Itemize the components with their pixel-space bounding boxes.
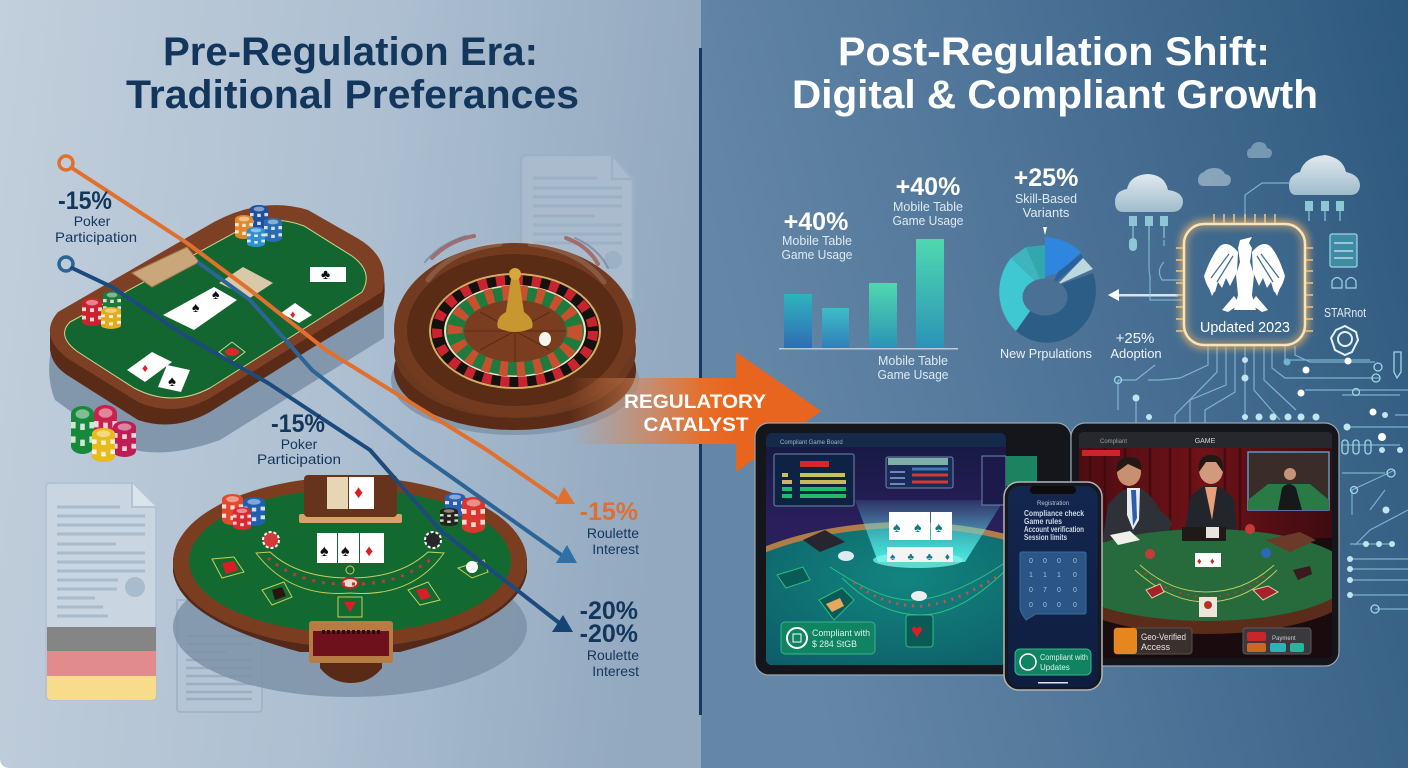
device: tablet left, game screen: Compliant Game Board [780, 440, 843, 446]
blackjack chip tray [309, 621, 393, 663]
stat: roulette interest orange: Roulette [587, 525, 639, 541]
phone keypad: 0 [1029, 602, 1033, 609]
stat: mobile usage left [782, 208, 852, 262]
icon: hexagon nut [1331, 326, 1358, 355]
eagle emblem [1204, 237, 1285, 312]
phone keypad: 1 [1043, 572, 1047, 579]
icon: background document top right [521, 155, 633, 300]
poker table community cards: ♠ [192, 299, 200, 315]
stat: skill-based variants: +25% [1014, 164, 1078, 192]
arrow: regulatory catalyst: REGULATORY [624, 392, 766, 413]
phone text [1024, 509, 1084, 542]
phone keypad: 0 [1073, 572, 1077, 579]
blackjack chip stacks [222, 493, 485, 548]
poker table community cards: ♠ [212, 286, 220, 302]
dealer man [1102, 457, 1172, 545]
phone compliance badge [1015, 649, 1091, 675]
label: new regulations: New Prpulations [1000, 346, 1092, 361]
blackjack table [173, 475, 527, 697]
blackjack dealer tray [299, 475, 402, 523]
title: pre-regulation era [126, 30, 579, 117]
icon: regulatory chip with eagle: Updated 2023 [1200, 319, 1290, 336]
phone keypad: 0 [1029, 558, 1033, 565]
age verified badge: Geo-Verified [1141, 632, 1186, 642]
phone keypad [1020, 552, 1086, 620]
stat: skill-based variants: Variants [1023, 205, 1070, 220]
roulette wheel [391, 236, 639, 435]
floating cards [887, 512, 953, 563]
phone compliance badge: Updates [1040, 663, 1070, 672]
stat: roulette interest navy: -20% [580, 597, 638, 625]
trend line: orange poker decline [59, 156, 575, 504]
age verified badge: Access [1141, 642, 1171, 652]
poker dealer tray [132, 247, 199, 287]
label: mobile usage under chart [878, 353, 948, 382]
poker chip stacks [82, 205, 282, 329]
icon: cloud small top [1247, 142, 1272, 158]
live table details [1110, 524, 1316, 617]
stat: adoption: Adoption [1110, 346, 1162, 361]
stat: roulette interest navy: Roulette [587, 647, 639, 663]
blackjack betting spots [222, 558, 478, 612]
arrow: regulatory catalyst: CATALYST [644, 415, 749, 436]
phone keypad: 0 [1043, 602, 1047, 609]
arrow: chip to pie [1108, 289, 1178, 301]
poker table community cards: ♣ [321, 266, 330, 282]
device: phone: Registration [1037, 501, 1069, 507]
rules panel [774, 454, 854, 506]
stat: mobile usage top: Mobile Table [893, 199, 963, 214]
stat: adoption: +25% [1116, 330, 1154, 347]
blackjack betting arc [212, 552, 488, 617]
phone keypad: 0 [1073, 558, 1077, 565]
stat: roulette interest orange: Interest [592, 541, 639, 557]
stat: mobile usage left: Game Usage [782, 247, 852, 262]
phone keypad: 1 [1029, 572, 1033, 579]
title: pre-regulation era: Pre-Regulation Era: [163, 30, 538, 74]
age verified badge [1114, 628, 1192, 654]
poker table community cards: ♦ [290, 309, 296, 321]
floating cards: ♠ [893, 519, 901, 535]
stat: mobile usage left: +40% [784, 208, 848, 236]
trend line: navy decline [59, 257, 573, 632]
circuit traces [1118, 183, 1408, 609]
floating cards: ♠ [935, 519, 943, 535]
label: start: STARnot [1324, 305, 1366, 320]
live table details: ♦ [1210, 556, 1215, 566]
poker table [49, 205, 385, 452]
title: pre-regulation era: Traditional Preferances [126, 73, 579, 117]
betting spots [777, 551, 1006, 647]
phone keypad: 0 [1057, 558, 1061, 565]
stat: poker participation middle: Participation [257, 451, 341, 467]
stat: poker participation middle [257, 410, 341, 467]
blackjack cards: ♠ [341, 543, 350, 560]
icon: server panel [1330, 234, 1357, 288]
game table surface [766, 522, 1004, 665]
phone text: Session limits [1024, 533, 1067, 542]
poker table community cards [127, 266, 346, 392]
phone keypad: 7 [1043, 587, 1047, 594]
icon: background document bottom [177, 600, 262, 712]
stat: mobile usage top [892, 173, 964, 228]
floating cards: ♠♣♣♦ [890, 552, 950, 563]
poker table community cards: ♠ [168, 373, 176, 390]
phone keypad: 0 [1073, 602, 1077, 609]
phone text: Compliance check [1024, 509, 1084, 518]
inset video panel [1248, 452, 1329, 510]
stat: poker participation top: -15% [58, 187, 112, 215]
arrow: regulatory catalyst [570, 352, 821, 472]
stat: skill-based variants: Skill-Based [1015, 191, 1077, 206]
icon: regulatory chip with eagle [1176, 214, 1313, 345]
stat: roulette interest navy: Interest [592, 663, 639, 679]
stat: poker participation middle: -15% [271, 410, 325, 438]
roulette motion streaks [425, 236, 608, 282]
stat: roulette interest orange: -15% [580, 498, 638, 526]
live table [1102, 598, 1332, 634]
stat: mobile usage left: Mobile Table [782, 233, 852, 248]
live table details: ♦ [1197, 556, 1202, 566]
green promo tile [1006, 456, 1037, 486]
title: post-regulation shift: Post-Regulation Shift: [838, 30, 1270, 74]
icon: cloud left [1115, 174, 1183, 251]
stat: mobile usage top: Game Usage [892, 213, 964, 228]
circuit nodes [1132, 357, 1403, 598]
phone compliance badge: Compliant with [1040, 653, 1088, 662]
blackjack cards: ♦ [365, 543, 373, 560]
chips: loose stack [71, 405, 136, 462]
label: mobile usage under chart: Game Usage [878, 367, 948, 382]
roulette spindle [497, 272, 533, 332]
phone keypad: 0 [1029, 587, 1033, 594]
stat: poker participation middle: Poker [281, 436, 318, 452]
trend line: light blue decline [199, 263, 577, 563]
stat: mobile usage top: +40% [896, 173, 960, 201]
central divider [699, 48, 702, 715]
compliance badge tablet [781, 622, 875, 654]
stat: roulette interest navy: -20% [580, 620, 638, 648]
poker table community cards: ♦ [142, 361, 148, 375]
card shoe [803, 530, 845, 552]
stat: adoption [1110, 330, 1162, 361]
title: post-regulation shift [792, 30, 1318, 117]
device: tablet left, game screen [754, 422, 1071, 676]
blackjack cards: ♠ [320, 543, 329, 560]
phone text: Account verification [1024, 525, 1084, 534]
phone keypad: 0 [1073, 587, 1077, 594]
spotlight beam [855, 500, 1004, 562]
device: tablet right, live dealer [1070, 422, 1340, 667]
blackjack dealer tray: ♦ [354, 482, 363, 502]
stat: poker participation top: Poker [74, 213, 111, 229]
bar chart: mobile table game usage [779, 239, 958, 350]
title: post-regulation shift: Digital & Compliant Growth [792, 73, 1318, 117]
phone keypad: 1 [1057, 572, 1061, 579]
phone keypad: 0 [1057, 587, 1061, 594]
device: tablet right, live dealer: Compliant [1100, 439, 1127, 445]
payment badge [1243, 628, 1311, 654]
label: mobile usage under chart: Mobile Table [878, 353, 948, 368]
roulette ball [539, 332, 551, 346]
dealer woman [1185, 455, 1237, 530]
phone text: Game rules [1024, 517, 1062, 526]
icon: cloud right [1289, 155, 1360, 221]
payment badge: Payment [1272, 636, 1296, 642]
device: phone [1004, 482, 1102, 690]
pie chart: new regulations [999, 227, 1096, 343]
panel: pre-regulation background [0, 0, 701, 768]
odds panel [886, 457, 953, 488]
panel: post-regulation background [701, 0, 1408, 768]
decorative corner bottom-left [0, 758, 10, 768]
stat: skill-based variants [1014, 164, 1078, 220]
device: tablet right, live dealer: GAME [1195, 438, 1216, 445]
compliance badge tablet: Compliant with [812, 628, 870, 639]
floating cards: ♠ [914, 519, 922, 535]
stat: roulette interest navy [580, 597, 639, 679]
icon: cloud small centre [1198, 168, 1231, 186]
circuit ring nodes [1114, 352, 1401, 613]
stat: poker participation top [55, 187, 137, 245]
side panel [982, 456, 1006, 505]
phone keypad: 0 [1043, 558, 1047, 565]
compliance badge tablet: $ 284 StGB [812, 639, 857, 650]
stat: roulette interest orange [580, 498, 639, 557]
blackjack cards [317, 533, 384, 563]
icon: document with German flag [46, 483, 156, 700]
phone keypad: 0 [1057, 602, 1061, 609]
betting spots: ♥ [911, 621, 923, 643]
stat: poker participation top: Participation [55, 229, 137, 245]
